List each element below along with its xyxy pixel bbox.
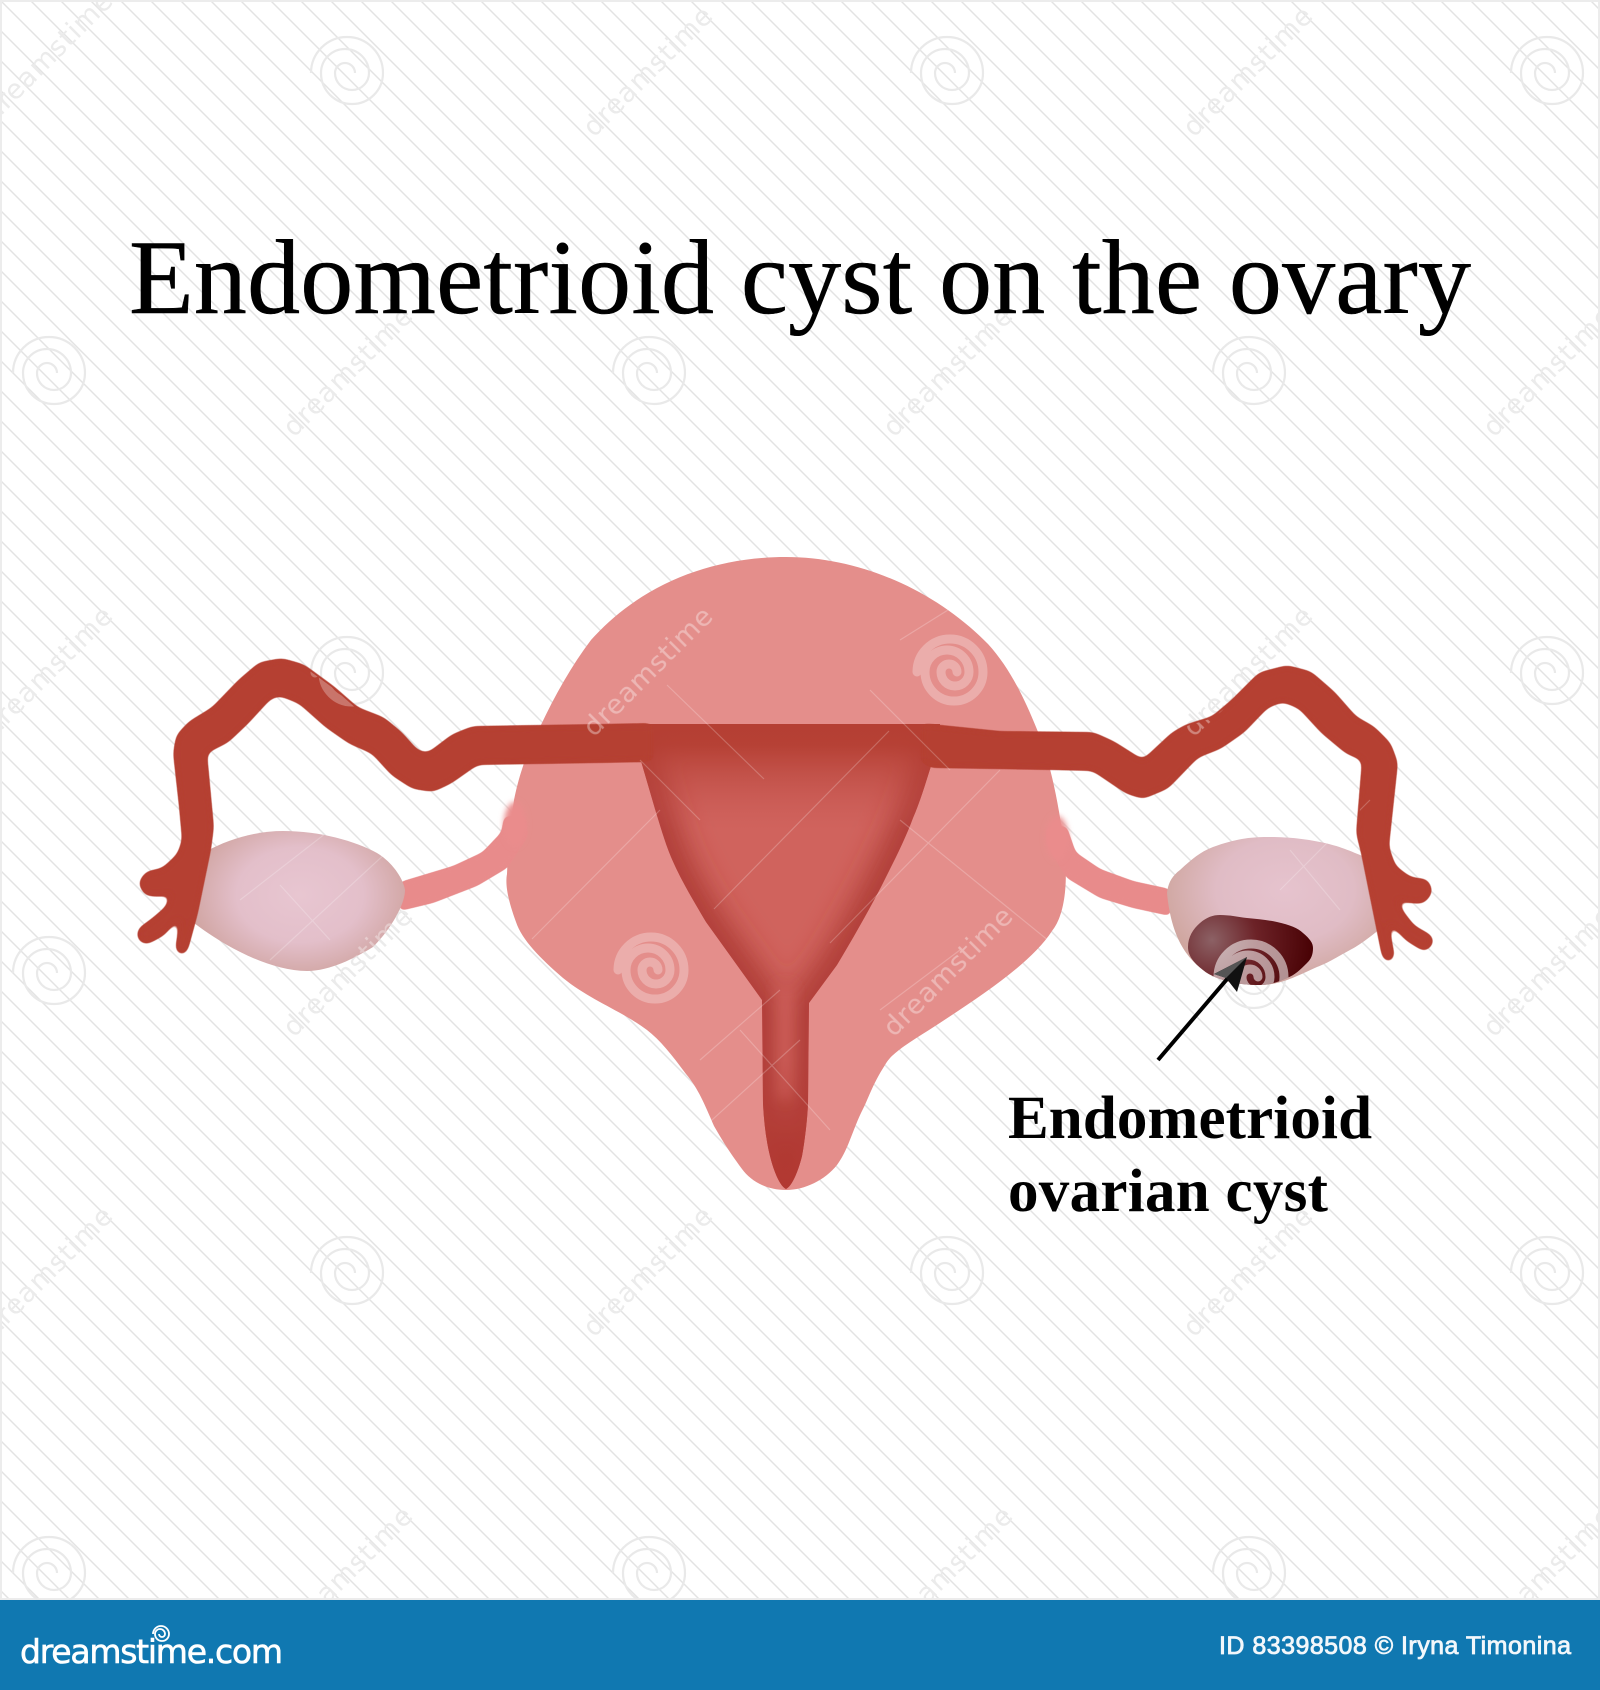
- watermark pattern: dreamstime: [1177, 1201, 1319, 1343]
- cyst label: [1008, 1085, 1372, 1225]
- watermark pattern: dreamstime: [877, 301, 1019, 443]
- cyst label: Endometrioid: [1008, 1085, 1372, 1152]
- left ovary: [190, 831, 405, 971]
- left ligament: [400, 802, 527, 910]
- right fallopian tube and fimbriae: [922, 667, 1432, 961]
- cyst label: ovarian cyst: [1008, 1158, 1329, 1225]
- watermark pattern: dreamstime: [277, 1501, 419, 1643]
- title: Endometrioid cyst on the ovary: [129, 219, 1471, 336]
- uterine cavity and cervical canal: [641, 724, 940, 1189]
- arrow pointing to cyst: [1158, 957, 1247, 1060]
- uterus body: [506, 557, 1066, 1190]
- image id and credit: ID 83398508 © Iryna Timonina: [1219, 1632, 1571, 1660]
- watermark overlay on anatomy: [240, 590, 1370, 1140]
- watermark pattern: dreamstime: [1177, 1, 1319, 143]
- watermark overlay on anatomy: dreamstime: [277, 901, 419, 1043]
- watermark overlay on anatomy: dreamstime: [1177, 601, 1319, 743]
- right ovary: [1167, 837, 1385, 985]
- watermark pattern: dreamstime: [577, 1, 719, 143]
- footer banner: [0, 1600, 1600, 1690]
- watermark pattern: dreamstime: [1177, 601, 1319, 743]
- watermark overlay on anatomy: dreamstime: [877, 901, 1019, 1043]
- endometrioid cyst: [1188, 915, 1313, 985]
- brand wordmark: dreamstime.com: [20, 1632, 283, 1671]
- watermark pattern: dreamstime: [577, 1201, 719, 1343]
- watermark pattern: dreamstime: [277, 301, 419, 443]
- watermark pattern: dreamstime: [277, 901, 419, 1043]
- right ligament: [1046, 816, 1170, 915]
- left fallopian tube and fimbriae: [139, 660, 652, 954]
- watermark overlay on anatomy: dreamstime: [577, 601, 719, 743]
- watermark pattern: dreamstime: [877, 1501, 1019, 1643]
